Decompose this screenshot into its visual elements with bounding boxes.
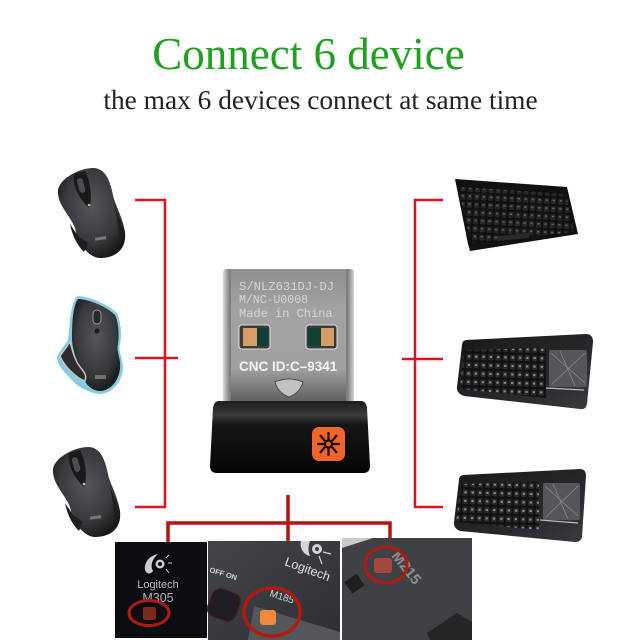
brand text: Logitech — [137, 579, 179, 591]
brand text: Logitech — [283, 555, 332, 584]
product label — [248, 606, 340, 640]
side button — [344, 574, 365, 594]
bottom connector — [168, 495, 390, 544]
title: Connect 6 device — [152, 29, 465, 79]
power switch — [205, 586, 243, 624]
model text: M185 — [268, 588, 296, 607]
connector markings: M/NC-U0008 — [239, 294, 308, 307]
unifying badge circled — [365, 547, 407, 583]
logitech logo — [301, 541, 331, 564]
left contact window — [239, 325, 270, 349]
model text: M305 — [142, 591, 174, 605]
switch label: OFF ON — [208, 565, 238, 582]
icon: bottom right keyboard — [454, 469, 586, 542]
CNC ID label: CNC ID:C–9341 — [239, 359, 338, 374]
icon: top left mouse — [58, 168, 125, 258]
left bracket connector — [135, 200, 178, 507]
dark recess — [427, 613, 472, 640]
USB receiver — [210, 269, 370, 473]
icon: bottom left mouse — [53, 447, 120, 537]
icon: middle right keyboard — [457, 334, 593, 409]
metal latch — [275, 379, 303, 397]
logitech logo — [145, 554, 172, 574]
connector markings — [239, 280, 334, 321]
photo: M215 mouse underside — [342, 538, 472, 640]
connector markings: S/NLZ631DJ-DJ — [239, 280, 334, 294]
model text: M215 — [388, 548, 424, 588]
unifying badge circled — [244, 588, 300, 636]
photo: M185 mouse underside — [205, 541, 340, 640]
right bracket connector — [402, 200, 443, 507]
icon: middle left mouse — [57, 296, 123, 394]
right contact window — [306, 325, 337, 349]
unifying badge circled — [129, 600, 169, 626]
black cap — [210, 401, 370, 473]
subtitle: the max 6 devices connect at same time — [103, 85, 538, 115]
photo: M305 mouse underside — [115, 542, 207, 638]
icon: top right keyboard — [455, 179, 578, 251]
icon: orange unifying logo — [312, 427, 345, 461]
connector markings: Made in China — [239, 307, 333, 321]
metal connector — [223, 269, 354, 402]
